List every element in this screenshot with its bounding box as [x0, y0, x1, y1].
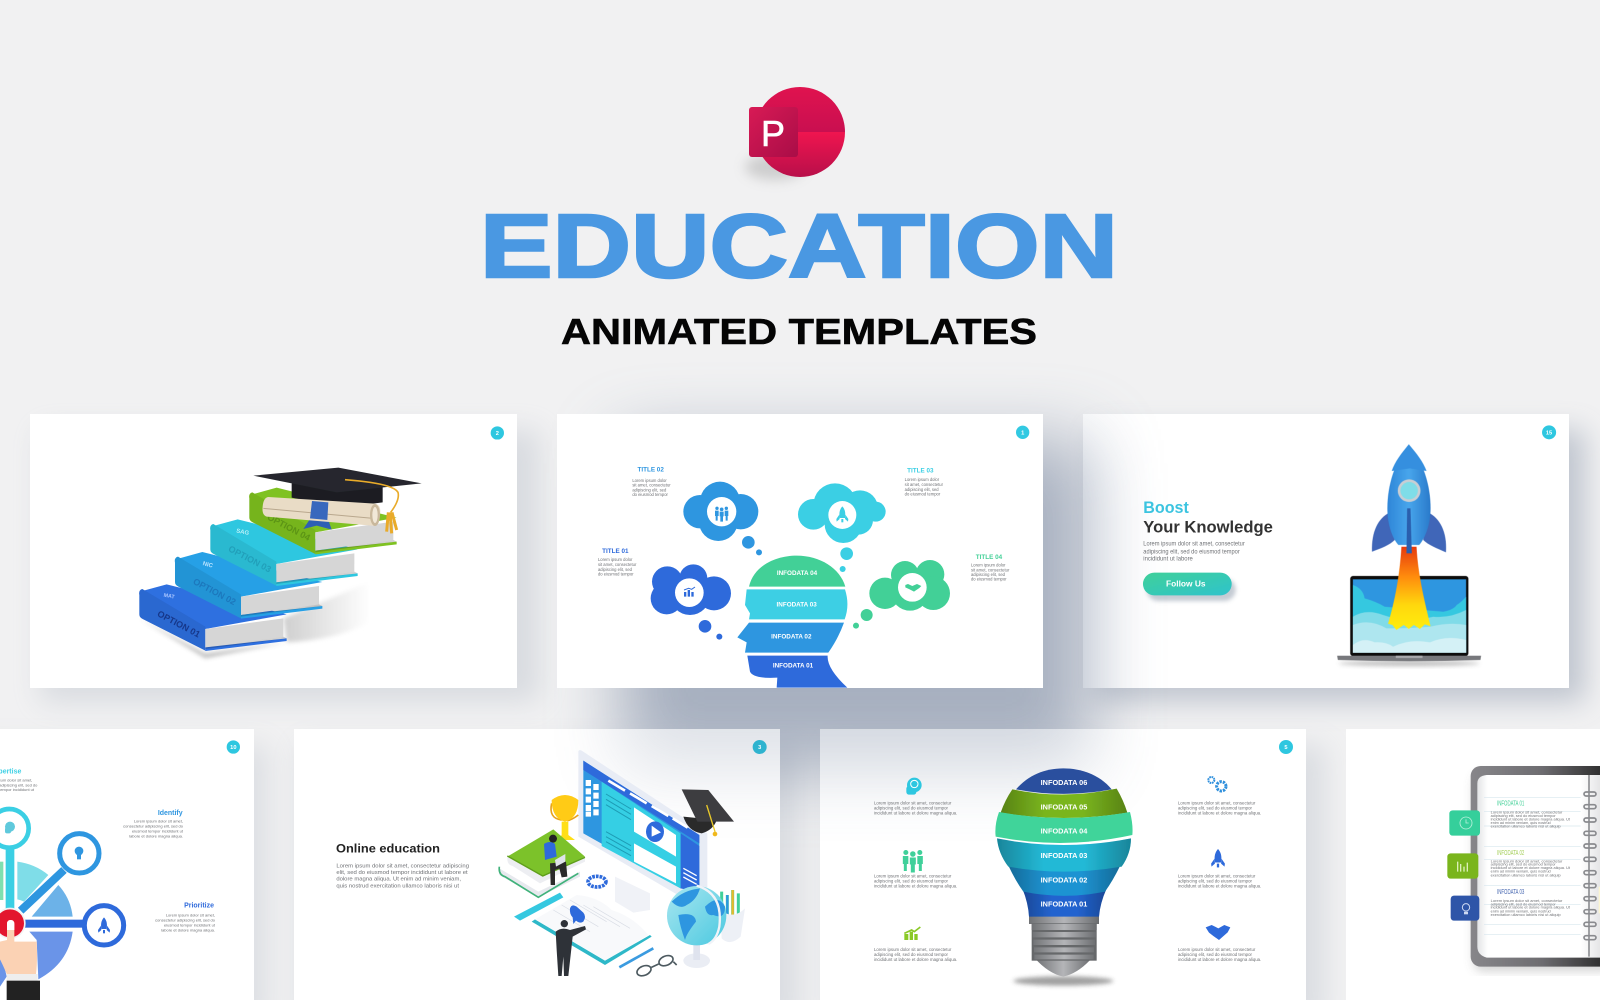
- text: right column: adipiscing elit, sed do eiusmod tempor: [1178, 952, 1253, 957]
- tab: bulb: [1451, 896, 1479, 921]
- laptop: [1337, 576, 1481, 666]
- page badge: 2: [496, 431, 499, 437]
- entry: infodata 03: Lorem ipsum dolor sit amet, consectetur: [1491, 899, 1562, 903]
- head: infodata 04: [749, 556, 845, 587]
- panel: books slide: [30, 414, 517, 688]
- ruler: [514, 893, 563, 921]
- text: title 03: adipiscing elit, sed: [905, 487, 939, 492]
- text: expertise: [0, 769, 38, 792]
- band: infodata 04: [995, 812, 1133, 843]
- book: option 02: NIC: [202, 561, 214, 570]
- text: title 02: TITLE 02: [637, 467, 664, 474]
- panel: process slide (cropped left): [0, 729, 254, 1000]
- text: title 04: Lorem ipsum dolor: [971, 563, 1006, 568]
- panel: online education slide: [294, 440, 1090, 1000]
- text: left column: Lorem ipsum dolor sit amet, consectetur: [874, 801, 952, 806]
- cloud: title 03: [798, 483, 886, 572]
- text: title 03: [905, 467, 944, 497]
- pencil: [619, 948, 653, 967]
- tassel: [345, 480, 398, 533]
- logo: PowerPoint: [745, 87, 845, 180]
- text: title 04: adipiscing elit, sed: [971, 572, 1006, 577]
- entry: infodata 03: INFODATA 03: [1497, 887, 1524, 896]
- text: right column: incididunt ut labore et dolore magna aliqua.: [1178, 957, 1261, 962]
- text: title 01: Lorem ipsum dolor: [598, 557, 633, 562]
- text: left column: incididunt ut labore et dolore magna aliqua.: [874, 883, 957, 888]
- text: title 01: sit amet, consectetur: [598, 562, 637, 567]
- text: left column: incididunt ut labore et dolore magna aliqua.: [874, 811, 957, 816]
- book: option 03: SAG: [236, 528, 250, 537]
- book: option 01: OPTION 01: [156, 609, 202, 639]
- logo letter: P: [761, 113, 785, 154]
- text: right column: adipiscing elit, sed do eiusmod tempor: [1178, 878, 1253, 883]
- pie wedges: [0, 862, 73, 987]
- entry: infodata 01: INFODATA 01: [1497, 798, 1524, 807]
- body text: quis nostrud exercitation ullamco laboris nisi ut: [336, 884, 459, 890]
- head: infodata 04: INFODATA 04: [777, 570, 818, 577]
- text: left column: adipiscing elit, sed do eiusmod tempor: [874, 952, 949, 957]
- band: infodata 02: [1008, 864, 1121, 896]
- band: infodata 05: [1001, 789, 1127, 818]
- book: option 04: OPTION 04: [266, 512, 312, 543]
- text: title 02: sit amet, consectetur: [632, 483, 671, 488]
- ring: head icon: [0, 809, 29, 848]
- student: [544, 835, 567, 885]
- text: title 01: adipiscing elit, sed: [598, 567, 633, 572]
- body text: [336, 863, 469, 890]
- text: right column: Lorem ipsum dolor sit amet, consectetur: [1178, 801, 1256, 806]
- book: option 02: OPTION 02: [191, 576, 238, 607]
- text: title 04: TITLE 04: [976, 554, 1003, 561]
- text: title 04: [971, 554, 1010, 582]
- page badge: 3: [758, 745, 761, 751]
- entry: infodata 02: incididunt ut labore et dolore magna aliqua. Ut: [1491, 866, 1570, 870]
- notebook page: [1477, 775, 1600, 958]
- entry: infodata 01: adipiscing elit, sed do eiusmod tempor: [1491, 814, 1556, 818]
- text: prioritize: Prioritize: [184, 903, 214, 910]
- stacked books: [499, 829, 585, 897]
- band: infodata 02: INFODATA 02: [1041, 875, 1087, 884]
- text: title 01: do eiusmod tempor: [598, 572, 634, 577]
- panel: light bulb slide: [620, 440, 1306, 1000]
- text: title 01: [598, 548, 637, 577]
- text: title 02: [632, 467, 671, 497]
- title: EDUCATION: [480, 197, 1118, 297]
- entry: infodata 03: [1491, 887, 1570, 917]
- body text: incididunt ut labore: [1143, 557, 1193, 563]
- heading: Your Knowledge: [1143, 517, 1273, 536]
- text: left column: [874, 801, 957, 962]
- text: title 02: adipiscing elit, sed: [632, 487, 667, 492]
- text: identify: consectetur adipiscing elit, sed do: [123, 824, 184, 829]
- entry: infodata 01: enim ad minim veniam, quis nostrud: [1491, 821, 1551, 825]
- text: prioritize: [155, 903, 216, 932]
- text: prioritize: labore et dolore magna aliqua.: [161, 927, 215, 932]
- tab: clock: [1449, 810, 1480, 836]
- notebook cover: [1471, 766, 1600, 972]
- globe: [667, 886, 726, 968]
- text: left column: adipiscing elit, sed do eiusmod tempor: [874, 806, 949, 811]
- tab: chart: [1447, 853, 1478, 879]
- band: infodata 04: INFODATA 04: [1041, 827, 1088, 836]
- button: follow us: [1143, 573, 1236, 601]
- body text: Lorem ipsum dolor sit amet, consectetur adipiscing: [336, 863, 469, 869]
- page badge: [1016, 426, 1029, 439]
- band: infodata 06: [1016, 768, 1112, 794]
- icon: rocket: [1211, 849, 1225, 867]
- hand: [0, 920, 40, 1000]
- text: title 04: do eiusmod tempor: [971, 577, 1007, 582]
- entry: infodata 02: INFODATA 02: [1497, 848, 1524, 857]
- head: infodata 01: INFODATA 01: [773, 663, 814, 670]
- text: prioritize: eiusmod tempor incididunt ut: [164, 922, 216, 927]
- page badge: 10: [230, 745, 236, 751]
- bulb base: [1029, 913, 1099, 977]
- logo circle: [755, 87, 845, 177]
- page badge: [753, 740, 767, 754]
- rocket: [1372, 444, 1446, 553]
- book stack: [139, 488, 397, 658]
- text: title 02: do eiusmod tempor: [632, 492, 669, 497]
- text: right column: incididunt ut labore et dolore magna aliqua.: [1178, 883, 1261, 888]
- entry: infodata 03: exercitation ullamco laboris nisi ut aliquip: [1491, 913, 1561, 917]
- entry: infodata 03: adipiscing elit, sed do eiusmod tempor: [1491, 902, 1556, 906]
- page badge: [1542, 425, 1556, 439]
- text: title 02: Lorem ipsum dolor: [632, 478, 667, 483]
- cloud: title 04: [853, 560, 950, 629]
- entry: infodata 01: exercitation ullamco laboris nisi ut aliquip: [1491, 825, 1561, 829]
- icon: chart: [904, 927, 920, 940]
- book: option 01: [139, 584, 287, 651]
- graduation cap: [253, 468, 422, 504]
- band: infodata 03: [997, 838, 1131, 872]
- speech bubble: [570, 905, 585, 924]
- head: infodata 01: [747, 656, 847, 688]
- body text: [1143, 542, 1245, 563]
- body text: elit, sed do eiusmod tempor incididunt ut labore et: [336, 870, 468, 876]
- icon: people: [903, 850, 923, 872]
- text: right column: [1178, 801, 1261, 962]
- band: infodata 03: INFODATA 03: [1041, 851, 1087, 860]
- icon: handshake: [1206, 925, 1230, 940]
- glasses: [635, 954, 677, 978]
- red button: [0, 908, 26, 939]
- text: title 03: Lorem ipsum dolor: [905, 477, 940, 482]
- entry: infodata 02: Lorem ipsum dolor sit amet, consectetur: [1491, 859, 1562, 863]
- body text: dolore magna aliqua. Ut enim ad minim veniam,: [336, 877, 461, 883]
- text: identify: eiusmod tempor incididunt ut: [132, 829, 184, 834]
- page badge: [227, 740, 240, 754]
- icon: gears: [1208, 777, 1226, 791]
- text: identify: [123, 810, 184, 839]
- monitor: [578, 750, 707, 913]
- subtitle: ANIMATED TEMPLATES: [561, 311, 1037, 352]
- stair shadow: [283, 592, 356, 644]
- text: title 01: TITLE 01: [602, 548, 629, 555]
- book: option 01: MAT: [163, 593, 176, 601]
- entry: infodata 03: incididunt ut labore et dolore magna aliqua. Ut: [1491, 906, 1570, 910]
- cloud: title 01: [651, 564, 731, 640]
- text: right column: Lorem ipsum dolor sit amet, consectetur: [1178, 873, 1256, 878]
- pencil cup: [720, 890, 745, 942]
- text: prioritize: consectetur adipiscing elit, sed do: [155, 917, 216, 922]
- connectors: [6, 848, 87, 928]
- page badge: [1279, 740, 1293, 754]
- text: right column: incididunt ut labore et dolore magna aliqua.: [1178, 811, 1261, 816]
- text: right column: Lorem ipsum dolor sit amet, consectetur: [1178, 947, 1256, 952]
- icon: head: [906, 778, 922, 795]
- spiral binding: [1584, 792, 1596, 940]
- logo square: [749, 107, 798, 157]
- gear: [588, 876, 606, 887]
- entry: infodata 03: enim ad minim veniam, quis nostrud: [1491, 909, 1551, 913]
- entry: infodata 02: enim ad minim veniam, quis nostrud: [1491, 870, 1551, 874]
- band: infodata 01: [1022, 888, 1107, 917]
- page badge: 15: [1546, 430, 1552, 436]
- body text: adipiscing elit, sed do eiusmod tempor: [1143, 549, 1240, 555]
- entry: infodata 01: Lorem ipsum dolor sit amet, consectetur: [1491, 811, 1562, 815]
- open book: [532, 895, 652, 965]
- book: option 04: [249, 488, 397, 554]
- band: infodata 01: INFODATA 01: [1041, 900, 1087, 909]
- entry: infodata 01: incididunt ut labore et dolore magna aliqua. Ut: [1491, 817, 1570, 821]
- button: follow us: Follow Us: [1166, 579, 1206, 589]
- card shadows: [0, 430, 1585, 1000]
- entry: infodata 01: [1491, 798, 1570, 829]
- text: left column: adipiscing elit, sed do eiusmod tempor: [874, 878, 949, 883]
- text: left column: Lorem ipsum dolor sit amet, consectetur: [874, 873, 952, 878]
- text: title 04: sit amet, consectetur: [971, 567, 1010, 572]
- book: option 02: [175, 552, 322, 619]
- band: infodata 05: INFODATA 05: [1041, 802, 1087, 811]
- page badge: [491, 426, 504, 440]
- heading: [1144, 502, 1272, 536]
- panel: notebook slide (cropped right): [1346, 729, 1600, 1000]
- teacher: [556, 920, 586, 976]
- head: infodata 03: INFODATA 03: [777, 601, 817, 608]
- text: left column: Lorem ipsum dolor sit amet, consectetur: [874, 947, 952, 952]
- head: infodata 03: [745, 589, 847, 619]
- text: left column: incididunt ut labore et dolore magna aliqua.: [874, 957, 957, 962]
- cloud: title 02: [683, 482, 762, 555]
- text: prioritize: Lorem ipsum dolor sit amet,: [166, 912, 215, 917]
- head: infodata 02: [737, 623, 844, 653]
- text: title 03: TITLE 03: [907, 467, 934, 474]
- page badge: 5: [1284, 745, 1288, 751]
- text: identify: Identify: [158, 810, 183, 817]
- diploma: [262, 497, 380, 530]
- entry: infodata 02: exercitation ullamco laboris nisi ut aliquip: [1491, 873, 1561, 877]
- flame: [1388, 547, 1431, 630]
- book: option 03: [210, 519, 358, 586]
- panel: head infographic slide: [557, 414, 1043, 688]
- text: right column: adipiscing elit, sed do eiusmod tempor: [1178, 806, 1253, 811]
- monitor cap: [682, 789, 734, 836]
- text: identify: Lorem ipsum dolor sit amet,: [134, 819, 183, 824]
- body text: Lorem ipsum dolor sit amet, consectetur: [1143, 542, 1245, 548]
- band: infodata 06: INFODATA 06: [1041, 778, 1087, 787]
- head: infodata 02: INFODATA 02: [771, 633, 812, 640]
- bulb shadow: [1013, 976, 1113, 986]
- heading: Boost: [1143, 498, 1189, 517]
- text: title 03: do eiusmod tempor: [905, 492, 941, 497]
- book: option 03: OPTION 03: [227, 544, 273, 574]
- text: title 03: sit amet, consectetur: [905, 482, 944, 487]
- panel: rocket slide: [1083, 414, 1569, 688]
- heading: Online education: [336, 843, 440, 856]
- text: identify: labore et dolore magna aliqua.: [129, 834, 183, 839]
- page badge: 1: [1021, 430, 1024, 436]
- entry: infodata 02: adipiscing elit, sed do eiusmod tempor: [1491, 863, 1556, 867]
- ring: rocket icon: [84, 906, 124, 945]
- trophy: [551, 795, 578, 840]
- ring: bulb icon: [60, 834, 99, 873]
- entry: infodata 02: [1491, 848, 1570, 877]
